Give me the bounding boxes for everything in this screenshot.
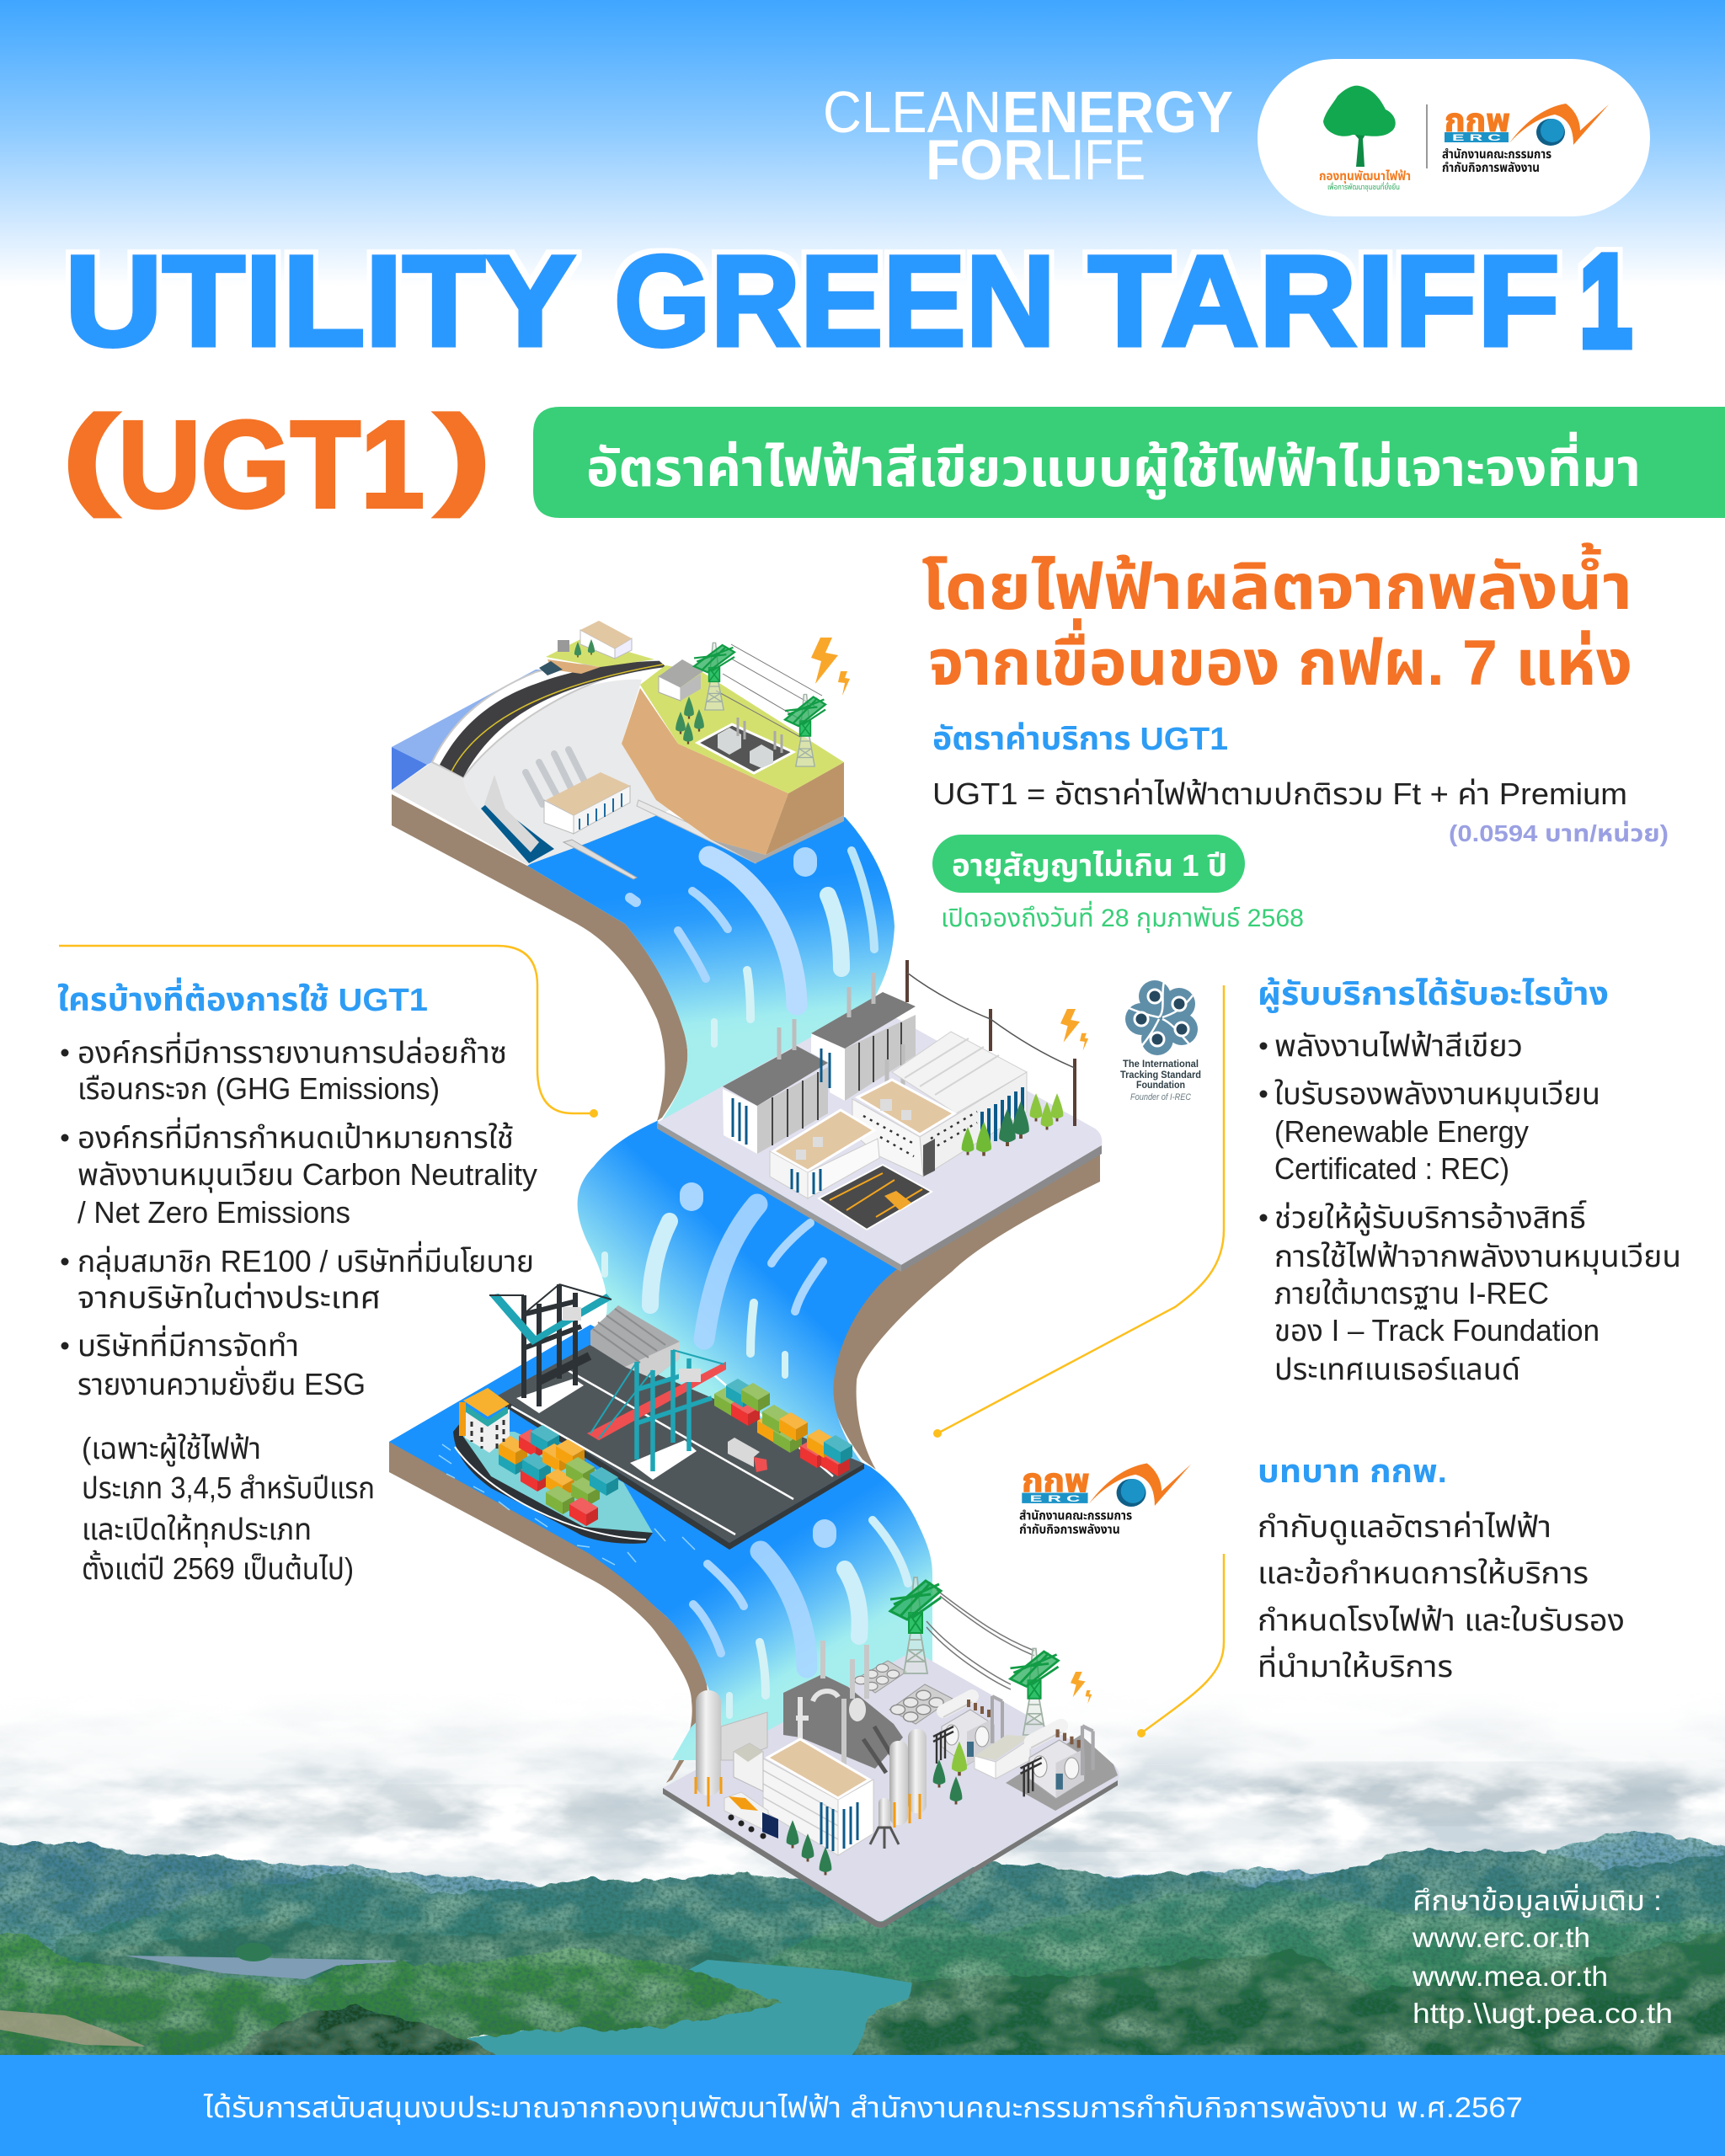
list: customers: จากบริษัทในต่างประเทศ [77, 1280, 381, 1315]
panel: ERC role: กำกับดูแลอัตราค่าไฟฟ้า [1258, 1509, 1551, 1545]
fan decks [855, 1661, 953, 1724]
wing roof [852, 1099, 923, 1177]
silos [696, 1690, 927, 1849]
panel: ERC role: บทบาท กกพ. [1258, 1454, 1447, 1490]
container stacks [714, 1379, 852, 1476]
badge: contract term: อายุสัญญาไม่เกิน 1 ปี [952, 848, 1227, 883]
logo: ERC second: กำกับกิจการพลังงาน [1019, 1523, 1120, 1537]
logo: ERC: กกพ [1445, 104, 1510, 139]
banner: green tariff subtitle [533, 407, 1725, 518]
panel: ERC role [1137, 1454, 1625, 1737]
water streaks [630, 851, 874, 1044]
logo: ERC: สำนักงานคณะกรรมการ [1442, 147, 1551, 162]
title: GREEN [614, 229, 1055, 373]
panel: ERC role: กำหนดโรงไฟฟ้า และใบรับรอง [1258, 1603, 1625, 1637]
panel: customer benefits: ผู้รับบริการได้รับอะไรบ้าง [1258, 977, 1609, 1013]
text block: more information links: http.\\ugt.pea.co.th [1413, 1998, 1673, 2029]
icon: tree logo [1319, 86, 1411, 191]
text block: more information links [1412, 1883, 1673, 2029]
logo: ERC second: E R C [1030, 1494, 1080, 1504]
logo: I-REC foundation: Founder of I-REC [1130, 1092, 1191, 1102]
scene: factory [657, 960, 1102, 1272]
pylons and wires [927, 1590, 1034, 1689]
main building [763, 1758, 838, 1855]
title: TARIFF [1088, 229, 1560, 373]
chimneys [779, 973, 903, 1095]
logo: I-REC foundation: Foundation [1136, 1081, 1185, 1091]
pylons [694, 643, 734, 710]
container ship [453, 1388, 653, 1544]
logo: I-REC foundation: Tracking Standard [1120, 1070, 1201, 1081]
heading: UGT1: UGT1 [118, 396, 425, 534]
trees [962, 1127, 974, 1155]
logo: ERC: กำกับกิจการพลังงาน [1442, 161, 1540, 175]
logo: ERC second [1019, 1464, 1191, 1537]
list: benefits: การใช้ไฟฟ้าจากพลังงานหมุนเวียน [1274, 1239, 1681, 1274]
footer band: ได้รับการสนับสนุนงบประมาณจากกองทุนพัฒนาไฟฟ้า สำนักงานคณะกรรมการกำกับกิจการพลังงาน พ.ศ.2567 [203, 2092, 1523, 2125]
spillway [481, 800, 554, 863]
list: customers: พลังงานหมุนเวียน Carbon Neutrality [77, 1157, 537, 1193]
channel walls [563, 840, 637, 879]
logo: ERC second: สำนักงานคณะกรรมการ [1019, 1508, 1132, 1523]
list: customers: / Net Zero Emissions [77, 1195, 350, 1230]
logo: I-REC foundation: The International [1123, 1059, 1199, 1070]
heading: UGT1: ) [435, 393, 491, 517]
list: benefits [1260, 1028, 1681, 1386]
text block: more information links: ศึกษาข้อมูลเพิ่มเติม : [1413, 1883, 1662, 1918]
logo: ERC: E R C [1452, 133, 1501, 143]
icon: lightning bolts [811, 638, 850, 696]
note: eligibility: ประเภท 3,4,5 สำหรับปีแรก [82, 1470, 375, 1505]
list: customers: บริษัทที่มีการจัดทำ [77, 1325, 299, 1363]
panel: ERC role: ที่นำมาให้บริการ [1258, 1646, 1453, 1684]
powerhouse [544, 800, 574, 834]
icon: tree logo: เพื่อการพัฒนาชุมชนที่ยั่งยืน [1327, 181, 1400, 191]
black crane [489, 1284, 611, 1413]
teal crane [590, 1350, 724, 1480]
list: customers: เรือนกระจก (GHG Emissions) [77, 1071, 440, 1106]
note: eligibility [82, 1431, 375, 1586]
panel: partner logos pill [1258, 59, 1650, 216]
logo: Clean Energy For Life [823, 79, 1233, 192]
text block: tariff heading: โดยไฟฟ้าผลิตจากพลังน้ำ [921, 542, 1632, 623]
water streaks [693, 1520, 908, 1716]
list: customers [61, 1032, 537, 1401]
text: booking date: เปิดจองถึงวันที่ 28 กุมภาพันธ์ 2568 [941, 900, 1304, 933]
text block: service rate: (0.0594 บาท/หน่วย) [1449, 820, 1669, 846]
penstocks [526, 750, 585, 804]
car [884, 1191, 911, 1210]
icon: tree logo: กองทุนพัฒนาไฟฟ้า [1319, 169, 1411, 184]
hut [659, 676, 681, 701]
list: benefits: ช่วยให้ผู้รับบริการอ้างสิทธิ์ [1274, 1200, 1587, 1235]
list: customers: องค์กรที่มีการรายงานการปล่อยก๊าซ [77, 1032, 507, 1070]
list: customers: กลุ่มสมาชิก RE100 / บริษัทที่มีนโยบาย [77, 1241, 534, 1279]
panel: ERC role: และข้อกำหนดการให้บริการ [1258, 1556, 1589, 1590]
note: eligibility: (เฉพาะผู้ใช้ไฟฟ้า [82, 1431, 261, 1466]
scene: gas power plant [663, 1577, 1119, 1928]
footer band [0, 2055, 1725, 2156]
title: 1 [1580, 229, 1632, 373]
text block: more information links: www.mea.or.th [1412, 1961, 1608, 1992]
main hall [892, 1032, 1027, 1113]
office block [770, 1151, 808, 1198]
stacks [823, 1641, 867, 1769]
list: benefits: ใบรับรองพลังงานหมุนเวียน [1274, 1076, 1600, 1112]
logo: I-REC foundation [1120, 980, 1201, 1102]
list: customers: องค์กรที่มีการกำหนดเป้าหมายการใช้ [77, 1117, 514, 1155]
panel: customer benefits [933, 977, 1681, 1438]
panel: who needs UGT1: ใครบ้างที่ต้องการใช้ UGT1 [57, 977, 428, 1018]
list: benefits: ภายใต้มาตรฐาน I-REC [1274, 1276, 1549, 1310]
wires [716, 644, 822, 737]
logo: Clean Energy For Life: ENERGY [1002, 79, 1233, 145]
note: eligibility: ตั้งแต่ปี 2569 เป็นต้นไป) [82, 1550, 354, 1586]
scene: hydro dam [392, 621, 850, 879]
cliff trees [676, 712, 686, 734]
water streaks [605, 1194, 823, 1375]
background sky [0, 0, 1725, 286]
water ripples [439, 1444, 695, 1565]
parking [819, 1165, 932, 1230]
silo building A [723, 1089, 757, 1154]
icon: lightning bolts [1060, 1009, 1088, 1051]
section: waterfall 2 to port [578, 1121, 1100, 1470]
crest island and building [539, 621, 654, 675]
substation [697, 724, 793, 773]
text block: tariff heading: จากเขื่อนของ กฟผ. 7 แห่ง [928, 618, 1632, 699]
list: benefits: Certificated : REC) [1274, 1151, 1509, 1186]
section: waterfall 3 to power plant [389, 1325, 932, 1783]
logo: Clean Energy For Life: LIFE [1044, 128, 1146, 192]
dam wall [463, 680, 674, 865]
mountains [0, 1832, 1725, 2080]
title: UTILITY [65, 229, 575, 373]
heading: UGT1: ( [62, 393, 118, 517]
illustration: isometric waterfall energy chain [389, 621, 1119, 1928]
clouds [0, 1715, 1725, 1886]
list: benefits: ของ I – Track Foundation [1274, 1313, 1599, 1348]
icon: lightning bolts [1071, 1672, 1092, 1704]
tanker truck [724, 1792, 778, 1839]
text block: service rate: อัตราค่าบริการ UGT1 [932, 722, 1228, 757]
scene: port [439, 1284, 864, 1565]
text block: tariff heading [921, 542, 1632, 699]
text block: service rate [932, 722, 1669, 846]
hangar [590, 1305, 680, 1379]
panel: who needs UGT1 [57, 946, 598, 1586]
transformers and control hut [933, 1696, 1093, 1798]
badge: contract term [932, 835, 1245, 893]
list: benefits: ประเทศเนเธอร์แลนด์ [1274, 1352, 1520, 1386]
logo: Clean Energy For Life: CLEAN [823, 79, 1001, 145]
boiler [783, 1674, 903, 1769]
list: customers: รายงานความยั่งยืน ESG [77, 1365, 366, 1401]
landscape photo: clouds and mountains [0, 1715, 1725, 2055]
silo building B [811, 1033, 845, 1101]
truck [728, 1438, 767, 1472]
list: benefits: (Renewable Energy [1274, 1114, 1529, 1149]
title [65, 229, 1632, 373]
logo: ERC [1442, 104, 1609, 175]
trees [933, 1759, 945, 1787]
logo: ERC second: กกพ [1022, 1463, 1090, 1499]
cliff [622, 688, 788, 855]
list: benefits: พลังงานไฟฟ้าสีเขียว [1274, 1028, 1523, 1063]
utility poles [907, 960, 1075, 1126]
note: eligibility: และเปิดให้ทุกประเภท [82, 1512, 312, 1547]
section: waterfall 1 from dam [392, 794, 895, 1121]
text block: more information links: www.erc.or.th [1412, 1922, 1590, 1953]
text block: service rate: UGT1 = อัตราค่าไฟฟ้าตามปกติรวม Ft + ค่า Premium [932, 776, 1627, 811]
tanks [721, 1712, 767, 1760]
logo: Clean Energy For Life: FOR [926, 128, 1044, 192]
banner: green tariff subtitle: อัตราค่าไฟฟ้าสีเขียวแบบผู้ใช้ไฟฟ้าไม่เจาะจงที่มา [586, 431, 1641, 500]
